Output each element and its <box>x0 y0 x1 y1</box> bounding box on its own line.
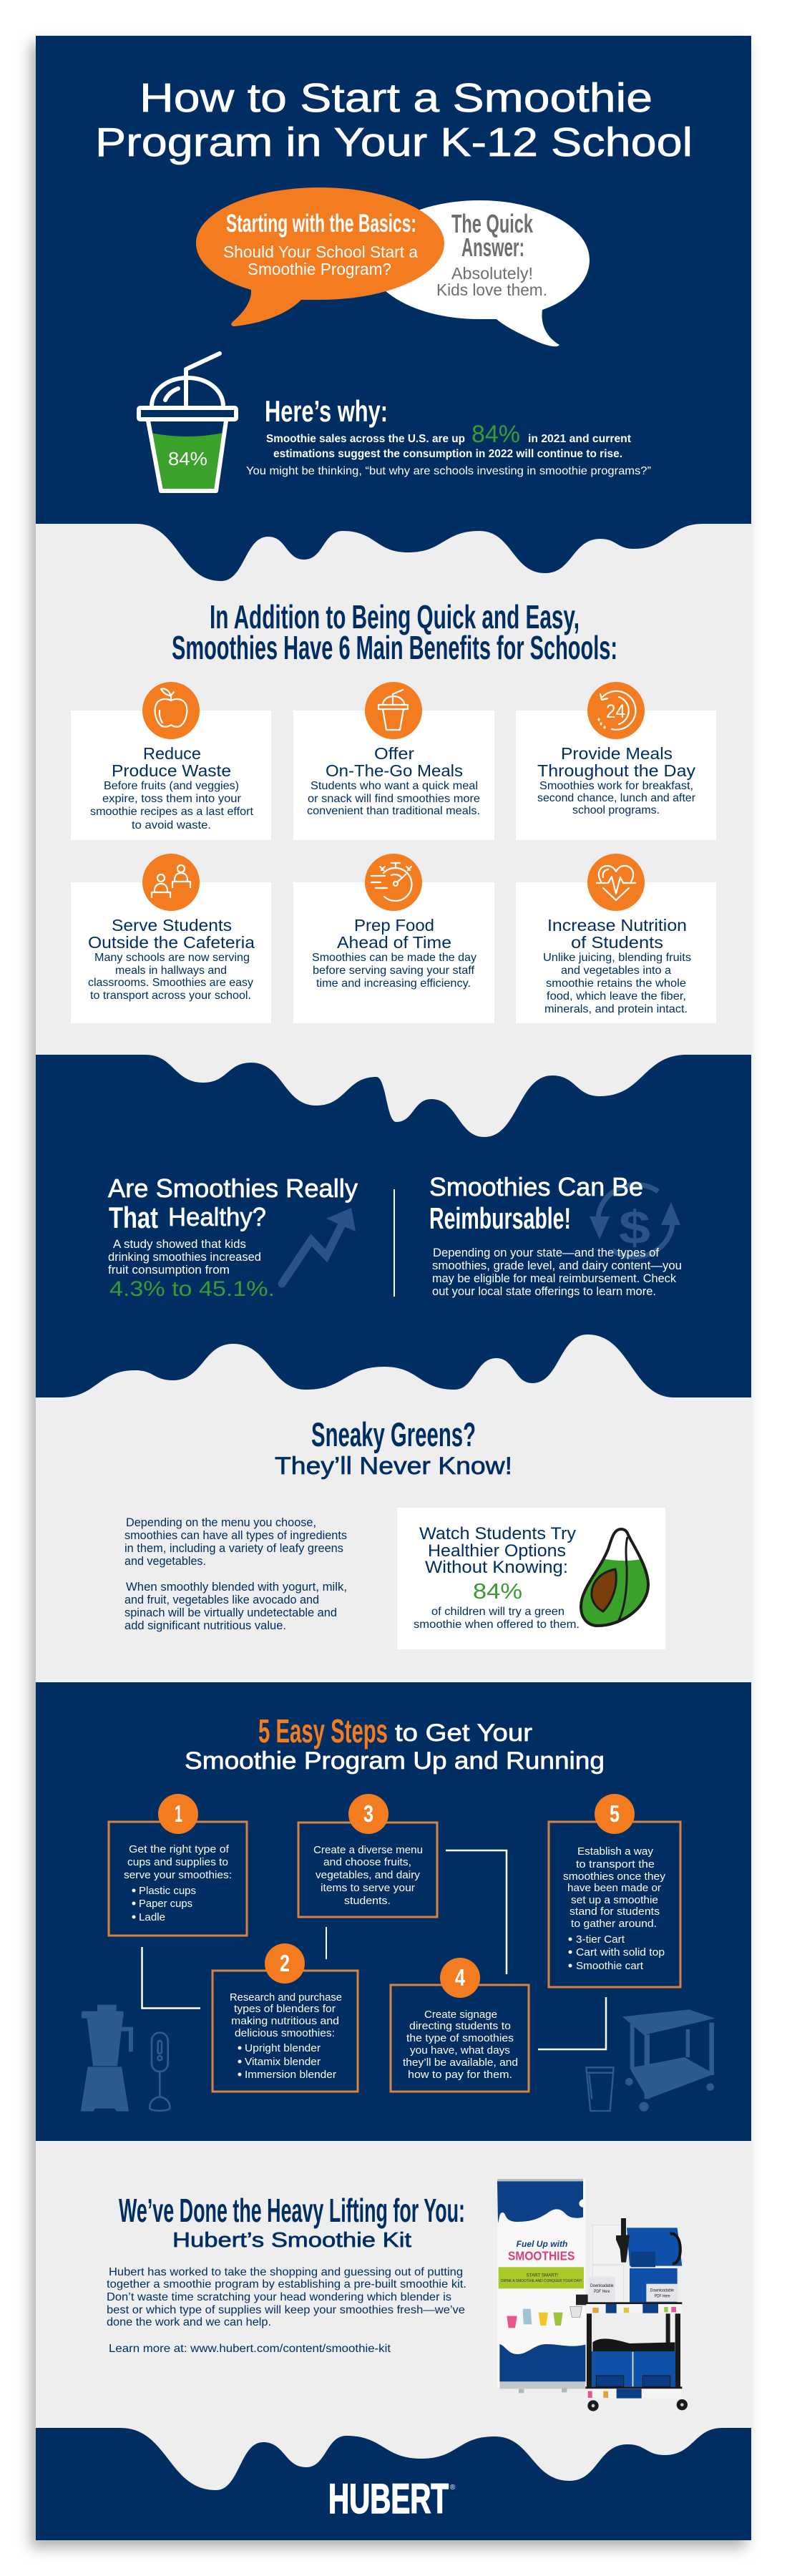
icon: faded glass <box>586 2067 614 2111</box>
text block: smoothie kit description: together a smoothie program by establishing a pre-built smoothie kit. <box>107 2278 466 2290</box>
step 1 box: Ladle <box>139 1911 165 1923</box>
card: serve students outside the cafeteria: meals in hallways and <box>115 965 227 977</box>
product photo: smoothie kit banner and cart <box>497 2179 688 2411</box>
card: reduce produce waste: expire, toss them into your <box>102 793 242 805</box>
step 1 box: serve your smoothies: <box>124 1869 232 1881</box>
heading: sneaky greens <box>275 1415 512 1480</box>
text block: smoothie kit description: best or which type of supplies will keep your smoothies fresh—we’ve <box>107 2304 465 2316</box>
heading: heavy lifting: Hubert’s Smoothie Kit <box>172 2229 411 2252</box>
icon: faded dollar cycle: $ <box>619 1201 650 1254</box>
card: offer on-the-go meals: convenient than traditional meals. <box>307 805 480 817</box>
logo: hubert: HUBERT <box>328 2476 449 2522</box>
callout: the quick answer bubble: The Quick <box>451 209 534 238</box>
callout: starting with the basics bubble: Starting with the Basics: <box>226 210 416 238</box>
card: prep food ahead of time <box>293 854 494 1023</box>
step 1 box <box>109 1794 247 1936</box>
banner <box>497 2179 585 2393</box>
text block: are smoothies really that healthy <box>108 1174 358 1301</box>
step 2 box: Vitamix blender <box>245 2056 321 2068</box>
panel: footer navy section <box>36 2428 751 2540</box>
card: increase nutrition of students: and vegetables into a <box>561 965 671 977</box>
card: reduce produce waste: Before fruits (and veggies) <box>104 780 239 792</box>
text block: smoothies can be reimbursable: Depending on your state—and the types of <box>433 1246 659 1259</box>
icon: smoothie cup 84%: 84% <box>168 448 207 469</box>
connector: step 1 to step 2 <box>142 1947 200 2008</box>
icon: faded rising arrow <box>282 1208 356 1284</box>
panel: 5 easy steps navy section <box>36 1682 751 2141</box>
card: prep food ahead of time: time and increasing efficiency. <box>316 977 471 990</box>
card: serve students outside the cafeteria: Many schools are now serving <box>94 952 250 964</box>
step 4 box: directing students to <box>409 2020 511 2032</box>
step 4 box: how to pay for them. <box>408 2069 512 2081</box>
card: increase nutrition of students <box>516 854 716 1023</box>
step 5 box: stand for students <box>570 1906 660 1918</box>
card: increase nutrition of students: food, which leave the fiber, <box>547 990 686 1002</box>
step 1 box: Get the right type of <box>129 1843 230 1855</box>
card: watch students try healthier options: of children will try a green <box>431 1606 564 1618</box>
step 4 box: they’ll be available, and <box>403 2057 518 2069</box>
panel: healthy and reimbursable navy section <box>36 1055 751 1397</box>
icon: smoothie cup <box>378 690 408 730</box>
step 4 box: Create signage <box>424 2009 497 2021</box>
step 5 box <box>549 1794 680 1987</box>
text block: here's why: estimations suggest the consumption in 2022 will continue to rise. <box>273 448 622 460</box>
text block: are smoothies really that healthy: That <box>109 1201 158 1234</box>
step 2 box <box>212 1943 358 2092</box>
heading: 5 easy steps: Smoothie Program Up and Running <box>185 1747 605 1775</box>
text block: are smoothies really that healthy: 4.3% to 45.1%. <box>109 1277 275 1301</box>
cart: PDF Here <box>655 2295 670 2299</box>
icon: 24 hours clock: 24 <box>606 701 625 722</box>
card: watch students try healthier options: Healthier Options <box>428 1541 566 1561</box>
step 5 box: to transport the <box>576 1858 655 1870</box>
panel: intro navy section <box>36 36 751 581</box>
callout: the quick answer bubble <box>369 200 590 346</box>
card: watch students try healthier options: 84% <box>473 1579 522 1604</box>
text block: here's why: in 2021 and current <box>528 433 632 445</box>
card: serve students outside the cafeteria: Outside the Cafeteria <box>88 933 255 952</box>
banner: START SMART! <box>527 2273 558 2278</box>
callout: the quick answer bubble: Answer: <box>461 233 524 262</box>
step 5 box: 5 <box>610 1800 620 1827</box>
text block: are smoothies really that healthy: Healthy? <box>168 1202 266 1231</box>
icon: students at desks <box>152 865 190 897</box>
card: prep food ahead of time: Ahead of Time <box>337 933 451 952</box>
card: serve students outside the cafeteria: to transport across your school. <box>90 990 251 1002</box>
card: offer on-the-go meals: On-The-Go Meals <box>326 761 463 780</box>
card: increase nutrition of students: of Students <box>571 933 663 952</box>
icon: avocado <box>581 1529 648 1626</box>
card: provide meals throughout the day <box>516 682 716 840</box>
heading: heavy lifting <box>119 2192 465 2252</box>
card: provide meals throughout the day: Provide Meals <box>561 744 673 763</box>
card: provide meals throughout the day: Smoothies work for breakfast, <box>539 780 693 792</box>
step 3 box: vegetables, and dairy <box>316 1869 420 1881</box>
text block: are smoothies really that healthy: A study showed that kids <box>113 1237 246 1251</box>
step 5 box: to gather around. <box>571 1918 657 1930</box>
banner: SMOOTHIES <box>508 2248 575 2263</box>
text block: sneaky greens description: in them, including a variety of leafy greens <box>124 1541 343 1555</box>
heading: heavy lifting: We’ve Done the Heavy Lifting for You: <box>119 2192 465 2229</box>
step 1 box: 1 <box>175 1800 182 1827</box>
callout: starting with the basics bubble: Smoothie Program? <box>248 260 391 278</box>
heading: sneaky greens: Sneaky Greens? <box>311 1415 476 1453</box>
text block: sneaky greens description: When smoothly blended with yogurt, milk, <box>126 1580 347 1594</box>
text block: sneaky greens description: spinach will be virtually undetectable and <box>124 1606 337 1619</box>
step 5 box: set up a smoothie <box>571 1894 658 1906</box>
heading: 6 main benefits <box>172 598 617 666</box>
card: increase nutrition of students: minerals, and protein intact. <box>544 1003 688 1015</box>
heading: 5 easy steps: to Get Your <box>395 1719 532 1747</box>
text block: sneaky greens description: add significant nutritious value. <box>124 1619 286 1632</box>
text block: smoothies can be reimbursable: Smoothies Can Be <box>429 1172 643 1201</box>
text block: are smoothies really that healthy: drinking smoothies increased <box>108 1250 261 1264</box>
text block: smoothies can be reimbursable: Reimbursable! <box>429 1201 571 1235</box>
step 3 box: students. <box>344 1895 391 1907</box>
connector: step 4 to step 5 <box>538 1997 606 2049</box>
text block: are smoothies really that healthy: fruit consumption from <box>108 1263 230 1277</box>
card: watch students try healthier options <box>397 1508 665 1649</box>
text block: here's why: Here’s why: <box>265 394 388 428</box>
banner: Fuel Up with <box>517 2239 567 2249</box>
text block: sneaky greens description: Depending on the menu you choose, <box>126 1516 316 1529</box>
card: serve students outside the cafeteria: Serve Students <box>112 916 232 935</box>
card: reduce produce waste: Produce Waste <box>112 761 231 780</box>
icon: apple <box>155 688 187 727</box>
card: offer on-the-go meals: or snack will find smoothies more <box>308 793 480 805</box>
text block: smoothie kit description <box>107 2266 466 2355</box>
icon: stopwatch <box>371 863 412 901</box>
step 2 box: Research and purchase <box>230 1991 342 2004</box>
text block: here's why <box>246 394 651 477</box>
icon: smoothie cup 84% <box>139 353 236 491</box>
text block: smoothies can be reimbursable <box>429 1172 682 1298</box>
card: watch students try healthier options: Watch Students Try <box>419 1524 576 1543</box>
step 4 box: the type of smoothies <box>406 2032 514 2044</box>
card: watch students try healthier options: Without Knowing: <box>425 1558 568 1577</box>
card: reduce produce waste: Reduce <box>143 744 201 763</box>
card: offer on-the-go meals: Offer <box>374 744 414 763</box>
step 5 box: Smoothie cart <box>576 1960 644 1972</box>
text block: are smoothies really that healthy: Are Smoothies Really <box>108 1174 358 1203</box>
title: Program in Your K-12 School <box>95 119 693 165</box>
step 3 box: items to serve your <box>321 1882 415 1894</box>
callout: the quick answer bubble: Absolutely! <box>451 264 533 283</box>
text block: smoothies can be reimbursable: may be eligible for meal reimbursement. Check <box>432 1272 676 1285</box>
step 2 box: types of blenders for <box>234 2003 336 2015</box>
step 2 box: making nutritious and <box>231 2015 339 2027</box>
card: increase nutrition of students: Increase Nutrition <box>547 916 687 935</box>
cart: Downloadable <box>650 2289 675 2293</box>
card: reduce produce waste: to avoid waste. <box>132 819 211 831</box>
title: How to Start a Smoothie <box>140 75 652 121</box>
step 2 box: delicious smoothies: <box>235 2027 335 2039</box>
text block: here's why: You might be thinking, “but why are schools investing in smoothie programs?” <box>246 465 651 477</box>
icon: faded blender <box>81 2005 131 2112</box>
icon: heart with pulse <box>597 866 635 900</box>
text block: smoothie kit description: Don’t waste time scratching your head wondering which blender is <box>107 2291 451 2303</box>
step 5 box: have been made or <box>567 1882 661 1894</box>
text block: sneaky greens description: and fruit, vegetables like avocado and <box>124 1593 319 1606</box>
text block: smoothies can be reimbursable: smoothies, grade level, and dairy content—you <box>432 1259 682 1272</box>
step 5 box: Cart with solid top <box>576 1946 665 1958</box>
cart <box>576 2218 688 2411</box>
step 3 box: Create a diverse menu <box>313 1844 423 1856</box>
card: prep food ahead of time: before serving saving your staff <box>313 965 475 977</box>
heading: 5 easy steps: 5 Easy Steps <box>258 1712 388 1750</box>
connector: step 2 to step 3 <box>326 1927 327 1959</box>
connector: step 3 to step 4 <box>446 1850 507 1974</box>
text block: sneaky greens description: smoothies can have all types of ingredients <box>124 1528 347 1542</box>
card: provide meals throughout the day: Throughout the Day <box>537 761 696 780</box>
step 4 box: you have, what days <box>410 2044 510 2057</box>
card: serve students outside the cafeteria: classrooms. Smoothies are easy <box>88 977 253 989</box>
text block: smoothie kit description: done the work and we can help. <box>107 2316 271 2328</box>
card: watch students try healthier options: smoothie when offered to them. <box>414 1619 580 1631</box>
callout: starting with the basics bubble <box>196 187 444 326</box>
callout: the quick answer bubble: Kids love them. <box>436 280 547 299</box>
step 2 box: Immersion blender <box>245 2069 336 2081</box>
heading: 5 easy steps <box>185 1712 605 1775</box>
card: provide meals throughout the day: school programs. <box>572 804 660 816</box>
title <box>95 75 693 165</box>
step 4 box <box>391 1958 529 2092</box>
step 5 box: Establish a way <box>577 1845 654 1858</box>
logo: hubert: ® <box>450 2484 456 2492</box>
callout: starting with the basics bubble: Should Your School Start a <box>223 243 418 261</box>
step 2 box: Upright blender <box>245 2042 321 2054</box>
card: reduce produce waste <box>71 682 271 840</box>
card: offer on-the-go meals <box>293 682 494 840</box>
icon: faded dollar cycle <box>590 1185 680 1257</box>
cart: PDF Here <box>594 2290 610 2294</box>
card: offer on-the-go meals: Students who want a quick meal <box>311 780 478 792</box>
step 3 box: 3 <box>363 1800 373 1827</box>
text block: smoothie kit description: Learn more at: www.hubert.com/content/smoothie-kit <box>109 2343 391 2355</box>
card: increase nutrition of students: Unlike juicing, blending fruits <box>543 952 691 964</box>
text block: sneaky greens description <box>124 1516 347 1632</box>
text block: sneaky greens description: and vegetables. <box>124 1554 206 1568</box>
step 3 box: and choose fruits, <box>323 1856 411 1868</box>
icon: faded cart <box>622 2009 715 2112</box>
cart: Downloadable <box>590 2284 614 2288</box>
text block: here's why: 84% <box>471 421 520 448</box>
banner: DRINK A SMOOTHIE AND CONQUER YOUR DAY! <box>501 2279 582 2283</box>
icon: faded immersion blender <box>150 2033 170 2111</box>
step 1 box: cups and supplies to <box>127 1856 228 1868</box>
card: provide meals throughout the day: second chance, lunch and after <box>537 792 696 804</box>
card: reduce produce waste: smoothie recipes as a last effort <box>90 806 254 818</box>
step 1 box: Plastic cups <box>139 1885 196 1897</box>
text block: smoothie kit description: Hubert has worked to take the shopping and guessing out of putting <box>109 2266 463 2278</box>
step 5 box: 3-tier Cart <box>576 1933 625 1946</box>
step 2 box: 2 <box>280 1950 290 1976</box>
card: prep food ahead of time: Prep Food <box>354 916 434 935</box>
step 4 box: 4 <box>455 1964 465 1991</box>
icon: 24 hours clock <box>599 691 635 730</box>
step 1 box: Paper cups <box>139 1898 192 1910</box>
step 5 box: smoothies once they <box>563 1870 666 1883</box>
text block: smoothies can be reimbursable: out your local state offerings to learn more. <box>432 1284 656 1298</box>
card: prep food ahead of time: Smoothies can be made the day <box>312 952 476 964</box>
step 3 box <box>298 1794 437 1917</box>
heading: sneaky greens: They’ll Never Know! <box>275 1453 512 1480</box>
card: increase nutrition of students: smoothie retains the whole <box>546 977 686 990</box>
text block: here's why: Smoothie sales across the U.S. are up <box>266 433 465 445</box>
heading: 6 main benefits: In Addition to Being Quick and Easy, <box>210 598 580 635</box>
card: serve students outside the cafeteria <box>71 854 271 1023</box>
